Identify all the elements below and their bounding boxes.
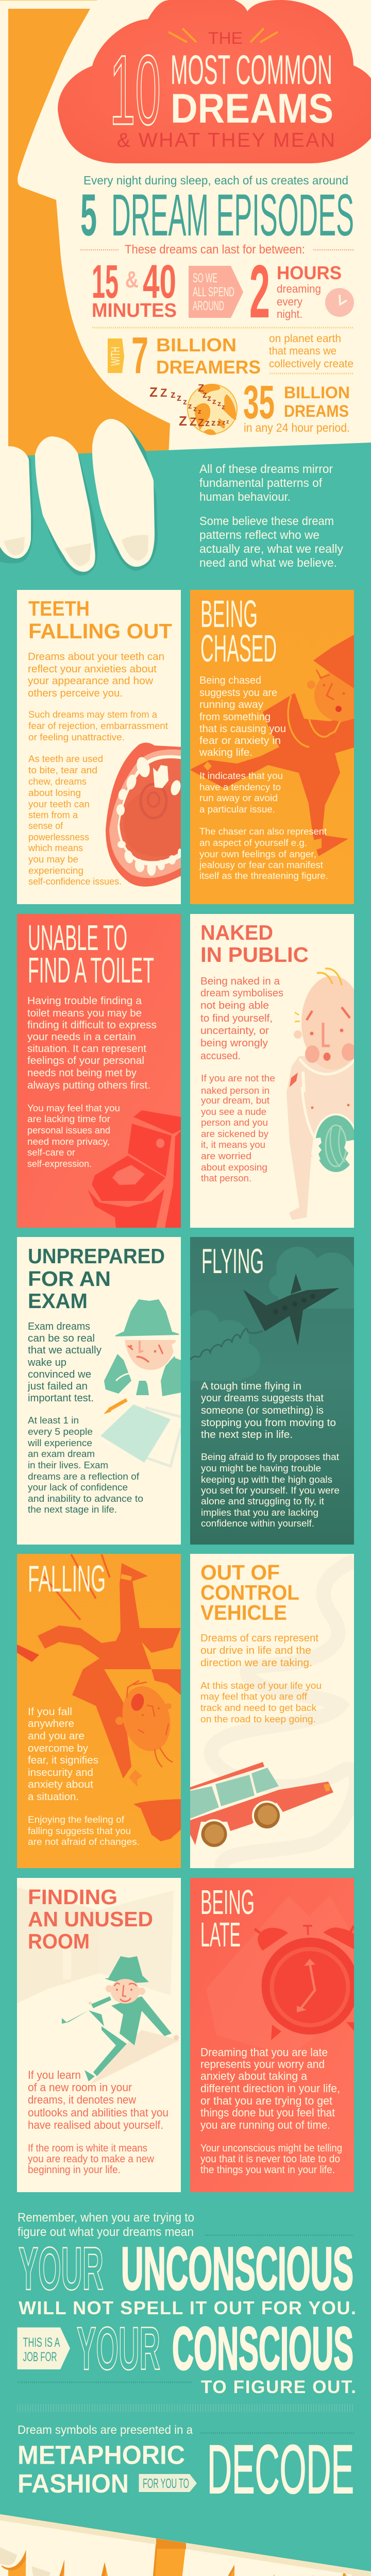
body text: Dreams of cars represent [200, 1633, 318, 1644]
body text: things done but you feel that [200, 2106, 335, 2119]
body text: fear or anxiety in [199, 735, 281, 747]
body text: will experience [27, 1437, 92, 1448]
body text: on the road to keep going. [200, 1714, 316, 1724]
body text: need more privacy, [27, 1136, 110, 1147]
body text: accused. [200, 1050, 241, 1062]
text block: fundamental patterns: patterns reflect who we [199, 528, 319, 541]
body text: Dreaming that you are late [200, 2046, 328, 2059]
illustration: falling plane with spiral trail [190, 1274, 340, 1360]
text block: fundamental patterns: fundamental patterns of [199, 476, 322, 489]
arrow label: so we all spend around: AROUND [193, 299, 224, 313]
heading: UNABLE TO [28, 918, 127, 958]
stat: 2 hours dreaming every night: night. [277, 308, 302, 320]
body text: you that it is never too late to do [200, 2154, 340, 2165]
body text: you see a nude [201, 1106, 266, 1117]
stat: 15 and 40 minutes: 15 [92, 256, 119, 308]
text block: fundamental patterns: Some believe these dream [199, 514, 334, 528]
body text: Such dreams may stem from a [28, 709, 158, 720]
body text: run away or avoid [199, 792, 278, 803]
heading [28, 1885, 153, 1953]
body text [27, 1321, 143, 1515]
heading [200, 592, 277, 670]
title: and what they mean: & WHAT THEY MEAN [117, 129, 335, 151]
stat: 2 hours dreaming every night: every [277, 295, 302, 308]
body text: If the room is white it means [28, 2143, 147, 2154]
panel: flying [187, 1237, 356, 1545]
heading: FIND A TOILET [28, 950, 154, 990]
body text: itself as the threatening figure. [199, 870, 328, 881]
arrow label: this is a job for: JOB FOR [23, 2350, 57, 2364]
body text: Enjoying the feeling of [28, 1814, 125, 1825]
body text: chew, dreams [28, 776, 87, 787]
headline: metaphoric fashion: METAPHORIC [18, 2440, 185, 2470]
body text: may feel that you are off [200, 1691, 308, 1702]
body text: At this stage of your life you [200, 1680, 322, 1691]
arrow label: this is a job for [18, 2328, 70, 2369]
text block: fundamental patterns: All of these dreams mirror [199, 462, 333, 476]
arrow label: with: WITH [109, 347, 123, 366]
icon: snoring Z letters: z [226, 419, 229, 425]
big number 5: 5 [80, 182, 97, 248]
illustration: man stepping into room [62, 1956, 179, 2081]
body text [201, 1381, 340, 1529]
icon: snoring Z letters: z [198, 408, 201, 415]
body text [28, 2069, 168, 2176]
body text: self-expression. [27, 1158, 92, 1169]
body text [28, 651, 168, 887]
body text: are worried [201, 1150, 251, 1161]
body text: Exam dreams [28, 1321, 90, 1332]
body text: stem from a [28, 809, 78, 820]
stat: 15 and 40 minutes [92, 256, 177, 321]
icon: snoring Z letters: z [217, 399, 221, 408]
heading: FINDING [28, 1885, 117, 1909]
icon: snoring Z letters: z [183, 398, 187, 406]
subhead: to figure out: TO FIGURE OUT. [201, 2377, 356, 2397]
heading: CONTROL [200, 1581, 299, 1604]
heading [200, 1561, 299, 1624]
body text: uncertainty, or [200, 1025, 269, 1037]
icon: snoring Z letters: z [217, 419, 221, 428]
body text: dreams are a reflection of [28, 1471, 140, 1482]
body text: important test. [28, 1393, 94, 1404]
body text: fear of rejection, embarrassment [28, 720, 168, 731]
stat: 15 and 40 minutes: 40 [143, 256, 176, 308]
body text: that we actually [28, 1345, 102, 1356]
body text: Dreams about your teeth can [28, 651, 164, 663]
headline: your conscious [77, 2315, 353, 2383]
body text: your lack of confidence [28, 1482, 128, 1493]
body text: jealousy or fear can manifest [199, 859, 323, 870]
body text: your appearance and how [28, 675, 154, 687]
body text: overcome by [28, 1743, 88, 1754]
heading [28, 1244, 165, 1313]
body text: represents your worry and [200, 2058, 325, 2071]
body text: anxiety about taking a [200, 2070, 308, 2082]
body text: running away [199, 699, 263, 710]
body text: and you are [28, 1731, 85, 1742]
body text: sense of [28, 820, 63, 831]
heading: FLYING [201, 1242, 264, 1281]
body text: your needs in a certain [27, 1031, 136, 1043]
body text: beginning in your life. [28, 2164, 121, 2176]
icon: open mouth with teeth [106, 742, 183, 887]
body text [200, 2046, 342, 2176]
body text: Your unconscious might be telling [200, 2143, 342, 2154]
heading: LATE [200, 1916, 241, 1954]
body text: feelings of your personal [27, 1055, 144, 1066]
body text: an exam dream [28, 1448, 95, 1459]
icon: snoring Z letters: z [177, 393, 181, 403]
arrow label: for you to: FOR YOU TO [143, 2476, 189, 2491]
stat: 35 billion dreams [243, 376, 350, 434]
body text: someone (or something) is [201, 1405, 324, 1416]
stat: 15 and 40 minutes: & [125, 266, 139, 293]
thought cloud with title [58, 0, 371, 163]
body text: others perceive you. [28, 688, 123, 699]
illustration: red car [190, 1762, 333, 1849]
body text: that person. [201, 1173, 251, 1183]
stat: 7 billion dreamers [131, 327, 353, 384]
illustration: running man [191, 635, 368, 856]
body text: reflect your anxieties about [28, 664, 157, 675]
body text: the next stage in life. [28, 1504, 117, 1515]
icon: snoring Z letters: z [222, 418, 226, 426]
arrow label: so we all spend around [189, 266, 243, 318]
body text: needs not being met by [27, 1067, 137, 1079]
illustration: bottom hands on orange [0, 2514, 371, 2576]
body text: which means [28, 842, 83, 853]
heading: UNPREPARED [28, 1244, 165, 1268]
stat: 2 hours dreaming every night: dreaming [277, 282, 321, 295]
body text: dreams, it denotes new [28, 2093, 136, 2106]
arrow label: so we all spend around: ALL SPEND [193, 285, 234, 299]
icon: snoring Z letters: z [193, 404, 197, 413]
body text: toilet means you may be [27, 1008, 142, 1019]
stat: 35 billion dreams: DREAMS [284, 402, 349, 420]
body text: have a tendency to [199, 782, 281, 792]
body text: you are ready to make a new [28, 2154, 155, 2165]
heading: FOR AN [28, 1267, 111, 1291]
body text: keeping up with the high goals [201, 1474, 332, 1485]
title: dreams: DREAMS [171, 86, 333, 132]
body text: our drive in life and the [200, 1645, 311, 1656]
stat: 35 billion dreams: 35 [243, 376, 275, 429]
body text: can be so real [28, 1333, 95, 1344]
body text: naked person in [201, 1085, 269, 1096]
headline: your conscious: YOUR [77, 2315, 160, 2383]
stat: 7 billion dreamers: collectively create [269, 358, 353, 370]
icon: snoring Z letters: Z [149, 384, 158, 400]
body text: If you learn [28, 2069, 81, 2081]
icon: snoring Z letters: z [222, 403, 225, 411]
heading [200, 1883, 255, 1954]
heading: AN UNUSED [28, 1907, 153, 1931]
body text: your dreams suggests that [201, 1393, 324, 1404]
body text: in their lives. Exam [28, 1460, 108, 1470]
body text: are lacking time for [27, 1113, 110, 1124]
body text: person and you [201, 1117, 268, 1128]
heading: NAKED [200, 921, 273, 944]
body text: dream symbolises [200, 988, 283, 999]
body text [200, 1633, 322, 1724]
illustration: naked baby figure [286, 968, 354, 1220]
body text: an aspect of yourself e.g. [199, 837, 307, 848]
heading: FALLING [28, 1558, 106, 1600]
panel: out of control vehicle [190, 1554, 356, 1868]
stat: 7 billion dreamers: BILLION [156, 334, 237, 355]
body text: of a new room in your [28, 2081, 132, 2094]
body text: you are running out of time. [200, 2119, 330, 2131]
panel: unable to find a toilet [17, 914, 181, 1228]
intro sentence: Every night during sleep, each of us creates around [83, 174, 348, 187]
illustration: winding road [211, 1561, 356, 1868]
body text: insecurity and [28, 1767, 93, 1778]
body text [199, 675, 328, 881]
body text: have realised about yourself. [28, 2119, 163, 2131]
body text: stopping you from moving to [201, 1417, 336, 1429]
heading: ROOM [28, 1929, 90, 1953]
panel: being chased [190, 590, 368, 904]
body text: finding it difficult to express [27, 1020, 157, 1031]
stat: 7 billion dreamers: 7 [131, 327, 148, 384]
panel: being chased: CHASED [200, 627, 277, 670]
body text: Having trouble finding a [27, 995, 142, 1007]
icon: snoring Z letters: z [203, 389, 207, 400]
body text: The chaser can also represent [199, 826, 327, 837]
illustration: alarm clock [254, 1925, 354, 2040]
heading: BEING [200, 1883, 255, 1922]
body text: waking life. [199, 747, 252, 758]
body text: If you are not the [201, 1073, 275, 1083]
body text: At least 1 in [28, 1415, 79, 1426]
arrow label: with [108, 338, 124, 373]
thought cloud with title: 10 [110, 35, 161, 145]
panel: finding an unused room [17, 1878, 181, 2192]
stat: 7 billion dreamers: that means we [269, 345, 336, 357]
icon: snoring Z letters: z [205, 418, 210, 428]
body text: suggests you are [199, 687, 277, 699]
panel: being late [190, 1878, 359, 2192]
body text: from something [199, 711, 271, 723]
body text: being wrongly [200, 1038, 268, 1049]
body text [200, 976, 283, 1183]
panel: falling [17, 1554, 181, 1868]
body text: your own feelings of anger, [199, 849, 316, 859]
icon: snoring Z letters: Z [198, 417, 204, 429]
stat: 15 and 40 minutes: MINUTES [92, 300, 177, 321]
body text: implies that you are lacking [201, 1507, 318, 1518]
body text: alone and struggling to fly, it [201, 1496, 324, 1506]
illustration: orange head silhouette with hand [8, 9, 170, 464]
icon: snoring Z letters: z [211, 418, 215, 428]
body text: or that you are trying to get [200, 2094, 332, 2107]
illustration: man at exam desk [100, 1299, 181, 1466]
headline: metaphoric fashion: FASHION [18, 2469, 129, 2498]
body text: powerlessness [28, 832, 89, 842]
body text: you may be [28, 854, 78, 865]
stat: 35 billion dreams: in any 24 hour period. [244, 421, 350, 434]
body text: outlooks and abilities that you [28, 2106, 168, 2119]
heading: VEHICLE [200, 1601, 287, 1624]
icon: clock [325, 288, 354, 317]
heading: BEING [200, 592, 258, 635]
text block: fundamental patterns: human behaviour. [199, 490, 291, 503]
heading: IN PUBLIC [200, 943, 309, 967]
stat: 2 hours dreaming every night: HOURS [277, 262, 342, 283]
body text: just failed an [27, 1381, 88, 1392]
title decoration: sparkle ticks [168, 28, 278, 42]
body text: situation. It can represent [27, 1043, 146, 1055]
body text: self-care or [27, 1147, 75, 1158]
body text: your dream, but [201, 1095, 269, 1106]
text block: fundamental patterns: need and what we believe. [199, 556, 337, 569]
closing section: your unconscious and conscious [18, 2211, 356, 2508]
arrow label: this is a job for: THIS IS A [23, 2335, 60, 2350]
intro: five dream episodes [80, 174, 354, 257]
headline: your unconscious: YOUR [19, 2235, 104, 2303]
stat: 7 billion dreamers: DREAMERS [156, 357, 261, 378]
body text: Being chased [199, 675, 261, 686]
title: the: THE [208, 29, 243, 47]
body text: experiencing [28, 865, 83, 876]
body text [27, 995, 157, 1169]
body text: falling suggests that you [28, 1825, 131, 1836]
heading: FALLING OUT [28, 619, 172, 643]
body text: or feeling unattractive. [28, 732, 125, 742]
icon: sleeping globe [188, 384, 237, 435]
arrow label: so we all spend around: SO WE [193, 271, 217, 285]
illustration: toilet [88, 1110, 181, 1228]
body text: track and need to get back [200, 1702, 317, 1713]
panel: unprepared for an exam [17, 1237, 181, 1545]
icon: snoring Z letters: z [212, 397, 216, 406]
panel: naked in public [190, 914, 363, 1228]
illustration: clouds [187, 1247, 356, 1381]
stat: 7 billion dreamers: on planet earth [269, 333, 341, 345]
panel: teeth falling out [17, 590, 183, 904]
body text: convinced we [28, 1369, 91, 1380]
text block: fundamental patterns: actually are, what we really [199, 542, 343, 555]
body text: You may feel that you [27, 1103, 120, 1113]
body text: a particular issue. [199, 804, 275, 815]
body text: fear, it signifies [28, 1755, 98, 1766]
text block: fundamental patterns [199, 462, 343, 569]
illustration: falling man [17, 1554, 181, 1841]
body text: your teeth can [28, 799, 90, 809]
body text: you set for yourself. If you were [201, 1485, 340, 1496]
icon: snoring Z letters: z [207, 394, 211, 403]
icon: snoring Z letters: Z [179, 413, 187, 429]
body text: direction we are taking. [200, 1657, 312, 1669]
body text: always putting others first. [27, 1080, 150, 1091]
body text: about exposing [201, 1162, 267, 1173]
subheading duration: These dreams can last for between: [125, 243, 305, 257]
body text [28, 1706, 140, 1847]
body text: the next step in life. [201, 1429, 293, 1440]
body text: anxiety about [28, 1779, 93, 1790]
body text: are sickened by [201, 1128, 269, 1139]
heading: OUT OF [200, 1561, 280, 1584]
text block: remember: figure out what your dreams mean [18, 2225, 194, 2239]
body text: confidence within yourself. [201, 1518, 314, 1529]
body text: and inability to advance to [28, 1493, 143, 1504]
body text: it, it means you [201, 1139, 265, 1150]
body text: As teeth are used [28, 753, 103, 764]
headline: metaphoric fashion [18, 2440, 185, 2498]
heading [28, 597, 172, 643]
body text: a situation. [28, 1791, 79, 1803]
headline: your unconscious [19, 2235, 353, 2303]
body text: anywhere [28, 1718, 74, 1730]
body text: Being afraid to fly proposes that [201, 1451, 339, 1462]
body text: to find yourself, [200, 1013, 273, 1024]
body text: personal issues and [27, 1125, 110, 1136]
body text: Being naked in a [200, 976, 280, 987]
stat: 2 hours dreaming every night: 2 [249, 249, 270, 333]
arrow label: for you to [139, 2474, 197, 2492]
icon: snoring Z letters: Z [160, 386, 167, 399]
icon: snoring Z letters: z [171, 389, 175, 400]
body text: are not afraid of changes. [28, 1836, 140, 1847]
illustration: room walls [17, 1887, 180, 2085]
heading [200, 921, 309, 967]
text block: dream symbols: Dream symbols are presented in a [18, 2423, 193, 2436]
body text: every 5 people [28, 1426, 93, 1437]
body text: self-confidence issues. [28, 876, 122, 887]
heading [28, 918, 154, 990]
text block: remember [18, 2211, 194, 2239]
illustration: upper hand fingers [0, 419, 158, 575]
body text: If you fall [28, 1706, 72, 1718]
heading: TEETH [28, 597, 90, 620]
body text: you might be having trouble [201, 1463, 321, 1473]
body text: that is causing you [199, 723, 286, 735]
heading: EXAM [28, 1289, 88, 1313]
icon: snoring Z letters: Z [190, 415, 196, 428]
text block: remember: Remember, when you are trying to [18, 2211, 194, 2225]
stat: 35 billion dreams: BILLION [284, 383, 350, 402]
body text: to bite, tear and [28, 765, 97, 775]
icon: snoring Z letters: z [188, 402, 192, 411]
body text: It indicates that you [199, 770, 283, 781]
body text: the things you want in your life. [200, 2164, 335, 2176]
body text: about losing [28, 787, 81, 798]
body text: different direction in your life, [200, 2082, 340, 2095]
body text: not being able [200, 1000, 269, 1011]
body text: wake up [27, 1357, 66, 1368]
subhead: will not spell it out: WILL NOT SPELL IT OUT FOR YOU. [19, 2297, 356, 2318]
body text: A tough time flying in [201, 1381, 301, 1392]
icon: snoring Z letters: Z [198, 383, 204, 394]
icon: snoring Z letters [149, 383, 229, 429]
stat: 2 hours dreaming every night [249, 249, 342, 333]
